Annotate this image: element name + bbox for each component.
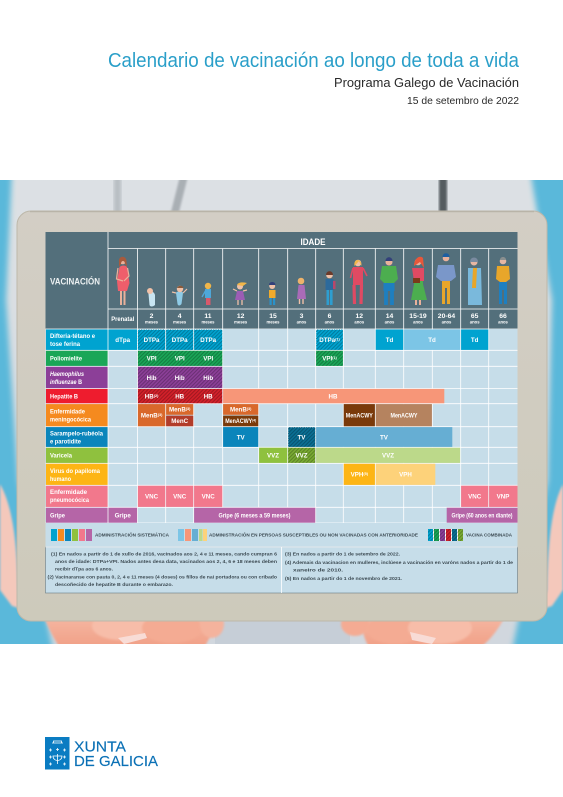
icon: child 6 years: [326, 271, 336, 305]
row: Varicela: VVZ: [382, 452, 394, 460]
right hand: [340, 622, 504, 644]
photo background: doctor and hands: [0, 170, 563, 660]
row: Haemophilus influenzae B: Hib: [203, 375, 213, 382]
row: Difteria-tétano e tose ferina: DTPa: [319, 337, 335, 344]
footnotes left: recibir dTpa aos 6 anos.: [55, 566, 114, 572]
row: Difteria-tétano e tose ferina: DTPa: [144, 337, 160, 344]
row: Virus do papiloma humano: Virus do papiloma: [50, 468, 100, 475]
icon: young woman 15-19: [411, 257, 427, 305]
row: Hepatite B: HB: [329, 394, 338, 400]
row: Enfermidade pneumocócica: pneumocócica: [50, 497, 89, 504]
age labels: 65: [471, 313, 479, 320]
row: Poliomielite: VPI: [322, 356, 332, 363]
row: Enfermidade meningocócica: MenB: [169, 407, 186, 414]
row: Sarampelo-rubéola e parotidite: TV: [380, 434, 389, 442]
row: Enfermidade meningocócica: (3): [186, 407, 191, 411]
legend: [46, 523, 518, 547]
row: Enfermidade meningocócica: Enfermidade: [50, 408, 85, 416]
row: Poliomielite: VPI: [203, 356, 213, 363]
age labels: meses: [234, 320, 248, 324]
age labels: 6: [328, 313, 332, 320]
row: Enfermidade meningocócica: MenACWY: [390, 412, 418, 420]
age labels: meses: [201, 320, 215, 324]
row: Hepatite B: (2): [154, 394, 159, 398]
row: Varicela: VVZ: [267, 452, 279, 460]
age labels: 20-64: [438, 313, 455, 320]
logo: Xunta de Galicia: DE GALICIA: [74, 753, 158, 770]
legend: susceptible persons: ADMINISTRACIÓN EN PERSOAS SUSCEPTIBLES OU NON VACINADAS CON ANTERIORIDADE: [209, 532, 418, 538]
icon: adult 20-64: [436, 253, 456, 304]
row: Sarampelo-rubéola e parotidite: [46, 427, 452, 463]
left hand: [44, 622, 225, 644]
row: Virus do papiloma humano: humano: [50, 476, 71, 483]
age labels: meses: [173, 320, 187, 324]
icon: pregnant woman: [116, 257, 130, 305]
row: Poliomielite: VPI: [147, 356, 157, 363]
legend: systematic: ADMINISTRACIÓN SISTEMÁTICA: [95, 532, 169, 538]
icon: child 3 years: [297, 278, 306, 304]
row: Gripe: Gripe (6 meses a 59 meses): [218, 512, 290, 520]
icon: older man 66: [496, 257, 510, 304]
main title: Calendario de vacinación ao longo de toda a vida: [108, 50, 520, 72]
age labels: anos: [442, 320, 452, 324]
row: Sarampelo-rubéola e parotidite: Sarampelo-rubéola: [50, 430, 103, 438]
panel: schedule grid: [46, 329, 518, 523]
date: 15 de setembro de 2022: [407, 96, 519, 107]
row: Haemophilus influenzae B: Hib: [175, 375, 185, 382]
row: Enfermidade pneumocócica: [46, 486, 518, 507]
age labels: 11: [204, 313, 212, 320]
row: Enfermidade meningocócica: MenB: [141, 412, 158, 420]
row: Gripe: Gripe: [50, 512, 65, 520]
row: Enfermidade pneumocócica: Enfermidade: [50, 489, 87, 496]
panel: footnotes: [46, 547, 518, 593]
age labels: meses: [145, 320, 159, 324]
row: Enfermidade meningocócica: MenACWY: [225, 418, 256, 425]
row: Enfermidade meningocócica: (4): [252, 419, 257, 423]
row: Difteria-tétano e tose ferina: DTPa: [172, 337, 188, 344]
row: Varicela: Varicela: [50, 452, 72, 460]
row: Enfermidade pneumocócica: VNC: [468, 494, 482, 500]
icon: teenager 14 years: [380, 257, 398, 305]
age labels: anos: [498, 320, 509, 324]
age labels: 3: [300, 313, 304, 320]
row: Enfermidade meningocócica: MenACWY: [346, 412, 374, 420]
age labels: anos: [385, 320, 395, 324]
row: Varicela: VVZ: [295, 452, 308, 460]
age labels: 2: [150, 313, 154, 320]
row: Gripe: Gripe: [115, 512, 131, 520]
icon: child 15 months: [269, 282, 276, 305]
icon: baby 2 months: [147, 288, 155, 306]
age labels: 12: [356, 313, 363, 320]
row: Difteria-tétano e tose ferina: [46, 330, 488, 404]
age labels: anos: [325, 320, 335, 324]
wordmark: XUNTA: [74, 738, 126, 756]
icon: baby 4 months: [172, 286, 187, 306]
row: Enfermidade pneumocócica: VNC: [173, 494, 187, 500]
logo: Xunta de Galicia: [45, 737, 158, 770]
icon: coat of arms: [45, 737, 70, 770]
icon: teenager 12 years: [350, 260, 367, 304]
age labels: [111, 313, 509, 324]
age labels: 66: [499, 313, 507, 320]
row: Sarampelo-rubéola e parotidite: TV: [237, 434, 246, 442]
row: Enfermidade meningocócica: (3): [247, 407, 252, 411]
heading: IDADE: IDADE: [300, 237, 326, 247]
row: Difteria-tétano e tose ferina: tose ferina: [50, 341, 80, 348]
row: Gripe: [46, 508, 518, 523]
footnotes left: descoñecido de hepatite B durante o embarazo.: [55, 582, 174, 588]
row: Hepatite B: HB: [175, 394, 185, 400]
row: Hepatite B: Hepatite B: [50, 394, 78, 400]
row: Enfermidade meningocócica: MenC: [171, 418, 189, 425]
age labels: Prenatal: [111, 316, 134, 323]
legend: susceptible persons: [178, 529, 418, 541]
row: Hepatite B: [46, 389, 444, 403]
row: Hepatite B: HB: [204, 394, 213, 400]
row: Gripe: Gripe (60 anos en diante): [452, 512, 512, 520]
row: Hepatite B: HB: [145, 394, 154, 400]
row: Enfermidade meningocócica: MenB: [230, 407, 247, 414]
row: Virus do papiloma humano: [46, 464, 435, 485]
panel: vaccination table header: [46, 232, 518, 329]
row: Virus do papiloma humano: (5): [363, 472, 369, 476]
age labels: anos: [297, 320, 307, 324]
row: Haemophilus influenzae B: influenzae B: [50, 379, 82, 386]
legend: systematic: [51, 529, 169, 541]
row: Poliomielite: (1): [332, 356, 338, 360]
row: Difteria-tétano e tose ferina: Td: [386, 337, 393, 344]
row: Enfermidade pneumocócica: VNC: [202, 494, 215, 500]
row: Poliomielite: VPI: [175, 356, 185, 363]
age labels: meses: [266, 320, 280, 324]
row: Difteria-tétano e tose ferina: (1): [335, 338, 340, 342]
row: Haemophilus influenzae B: Hib: [147, 375, 157, 382]
age labels: anos: [413, 320, 424, 324]
title block: [108, 50, 520, 107]
legend: combined vaccine: VACINA COMBINADA: [466, 532, 512, 538]
icon: older woman 65: [468, 258, 482, 305]
icon: child 11 months: [202, 283, 211, 305]
footnotes left: anos de idade: DTPa+VPI. Nados antes desa data, vacinados aos 2, 4, 6 e 18 meses deben: [55, 559, 277, 565]
footnotes right: (3) En nados a partir do 1 de setembro de 2022.: [285, 552, 401, 558]
row: Difteria-tétano e tose ferina: Td: [471, 337, 479, 344]
age labels: 15-19: [409, 313, 427, 320]
row: Sarampelo-rubéola e parotidite: TV: [298, 434, 306, 442]
row: Difteria-tétano e tose ferina: Difteria-tétano e: [50, 333, 95, 340]
age labels: 15: [269, 313, 277, 320]
row: Difteria-tétano e tose ferina: DTPa: [200, 337, 217, 344]
age labels: 14: [386, 313, 393, 320]
age labels: anos: [470, 320, 480, 324]
tablet frame: [17, 211, 547, 621]
row: Difteria-tétano e tose ferina: Td: [428, 337, 436, 344]
footnotes left: (2) Vacinaranse con pauta 0, 2, 4 e 11 meses (4 doses) os fillos de nai portadora ou con cribado: [48, 574, 277, 580]
row: Enfermidade pneumocócica: VNP: [497, 494, 509, 500]
footnotes left: (1) En nados a partir do 1 de xullo de 2016, vacinados aos 2, 4 e 11 meses, cando cumpran 6: [51, 552, 277, 558]
row: Haemophilus influenzae B: [46, 367, 222, 388]
row: Enfermidade meningocócica: [46, 404, 432, 426]
row: Difteria-tétano e tose ferina: dTpa: [115, 337, 131, 344]
footnotes right: [285, 552, 513, 582]
row: Enfermidade meningocócica: (3): [158, 413, 163, 417]
subtitle: Programa Galego de Vacinación: [334, 75, 519, 90]
legend: combined vaccine: [428, 529, 512, 541]
age labels: 12: [237, 313, 245, 320]
row: Haemophilus influenzae B: Haemophilus: [50, 371, 84, 378]
row: Varicela: [46, 448, 460, 463]
age labels: 4: [178, 313, 182, 320]
row: Enfermidade pneumocócica: VNC: [145, 494, 159, 500]
footnotes right: (5) En nados a partir do 1 de novembro de 2021.: [285, 576, 403, 582]
row: Virus do papiloma humano: VPH: [351, 472, 363, 478]
age labels: anos: [354, 320, 365, 324]
heading: VACINACIÓN: VACINACIÓN: [50, 276, 100, 288]
icon: child 12 months: [233, 282, 247, 305]
row: Poliomielite: Poliomielite: [50, 356, 82, 363]
row: Poliomielite: [46, 351, 343, 366]
row: Virus do papiloma humano: VPH: [399, 472, 412, 478]
footnotes right: (4) Ademais da vacinacion en mulleres, inclúese a vacinación en varóns nados a partir do 1 de: [285, 560, 513, 566]
row: Sarampelo-rubéola e parotidite: e parotidite: [50, 438, 81, 446]
row: Enfermidade meningocócica: meningocócica: [50, 416, 91, 424]
footnotes left: [48, 552, 277, 588]
footnotes right: xaneiro de 2010.: [293, 568, 344, 574]
